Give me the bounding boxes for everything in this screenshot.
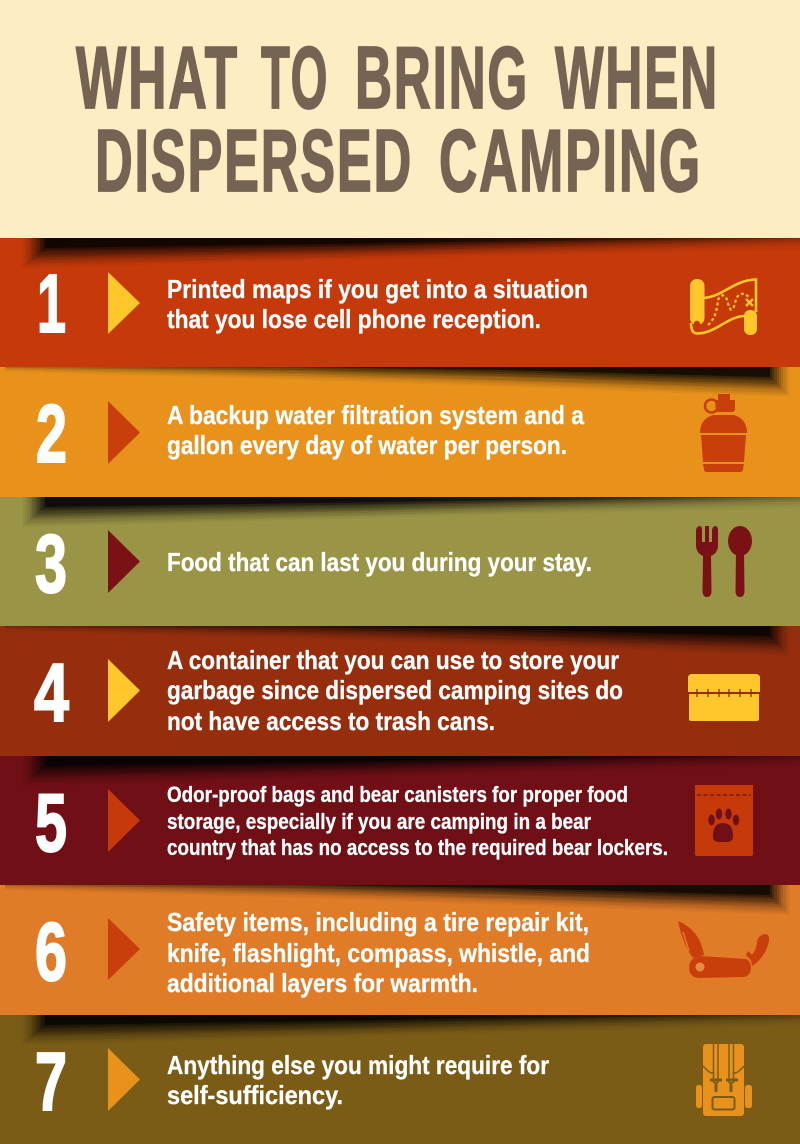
panel: item 3 food — [0, 495, 800, 626]
panel: item 4 garbage — [0, 624, 800, 756]
icon: water canteen — [700, 394, 747, 472]
title: DISPERSED — [95, 111, 413, 210]
text 5: country that has no access to the required bear lockers. — [167, 835, 668, 860]
text 6: additional layers for warmth. — [167, 968, 478, 998]
arrow 1 — [108, 272, 140, 334]
arrow 3 — [108, 530, 140, 593]
text 6: Safety items, including a tire repair kit, — [167, 907, 589, 937]
arrow 5 — [108, 789, 140, 852]
icon: backpack — [696, 1044, 752, 1116]
icon: treasure map — [690, 279, 757, 335]
arrow 6 — [108, 918, 140, 980]
number 6: 6 — [35, 905, 67, 998]
text 2: gallon every day of water per person. — [167, 430, 567, 460]
text 7: self-sufficiency. — [167, 1080, 343, 1110]
title panel — [0, 0, 800, 238]
text 5: Odor-proof bags and bear canisters for proper food — [167, 782, 628, 807]
icon: pocket knife — [678, 921, 769, 978]
text 4: garbage since dispersed camping sites do — [167, 675, 623, 705]
number 1: 1 — [37, 257, 66, 350]
panel: item 5 bear storage — [0, 754, 800, 885]
icon: odor-proof bag with paw — [695, 785, 753, 856]
icon: storage box — [688, 674, 760, 721]
number 3: 3 — [35, 517, 67, 610]
panel: item 2 water — [0, 365, 800, 497]
title: WHAT — [76, 28, 239, 127]
text 4: not have access to trash cans. — [167, 706, 495, 736]
text 5: storage, especially if you are camping in a bear — [167, 809, 591, 834]
number 7: 7 — [35, 1035, 67, 1128]
text 7: Anything else you might require for — [167, 1050, 549, 1080]
panel: item 1 maps — [0, 236, 800, 367]
text 4: A container that you can use to store your — [167, 645, 619, 675]
number 5: 5 — [35, 776, 67, 869]
text 1: Printed maps if you get into a situation — [167, 274, 588, 304]
panel: item 7 self-sufficiency — [0, 1013, 800, 1144]
text 1: that you lose cell phone reception. — [167, 304, 541, 334]
title: TO — [261, 28, 329, 127]
text 2 — [167, 400, 584, 460]
number 4: 4 — [34, 646, 69, 739]
text 1 — [167, 274, 588, 334]
arrow 2 — [108, 401, 140, 464]
icon: fork and spoon — [696, 526, 752, 597]
text 6: knife, flashlight, compass, whistle, and — [167, 938, 590, 968]
text 4 — [167, 645, 623, 736]
panel: item 6 safety items — [0, 883, 800, 1015]
text 5 — [167, 782, 668, 860]
title — [76, 28, 719, 210]
text 7 — [167, 1050, 549, 1110]
text 6 — [167, 907, 590, 998]
title: BRING — [355, 28, 529, 127]
text 3: Food that can last you during your stay. — [167, 547, 592, 577]
number 2: 2 — [36, 387, 67, 480]
text 2: A backup water filtration system and a — [167, 400, 584, 430]
arrow 4 — [108, 659, 140, 722]
arrow 7 — [108, 1048, 140, 1111]
